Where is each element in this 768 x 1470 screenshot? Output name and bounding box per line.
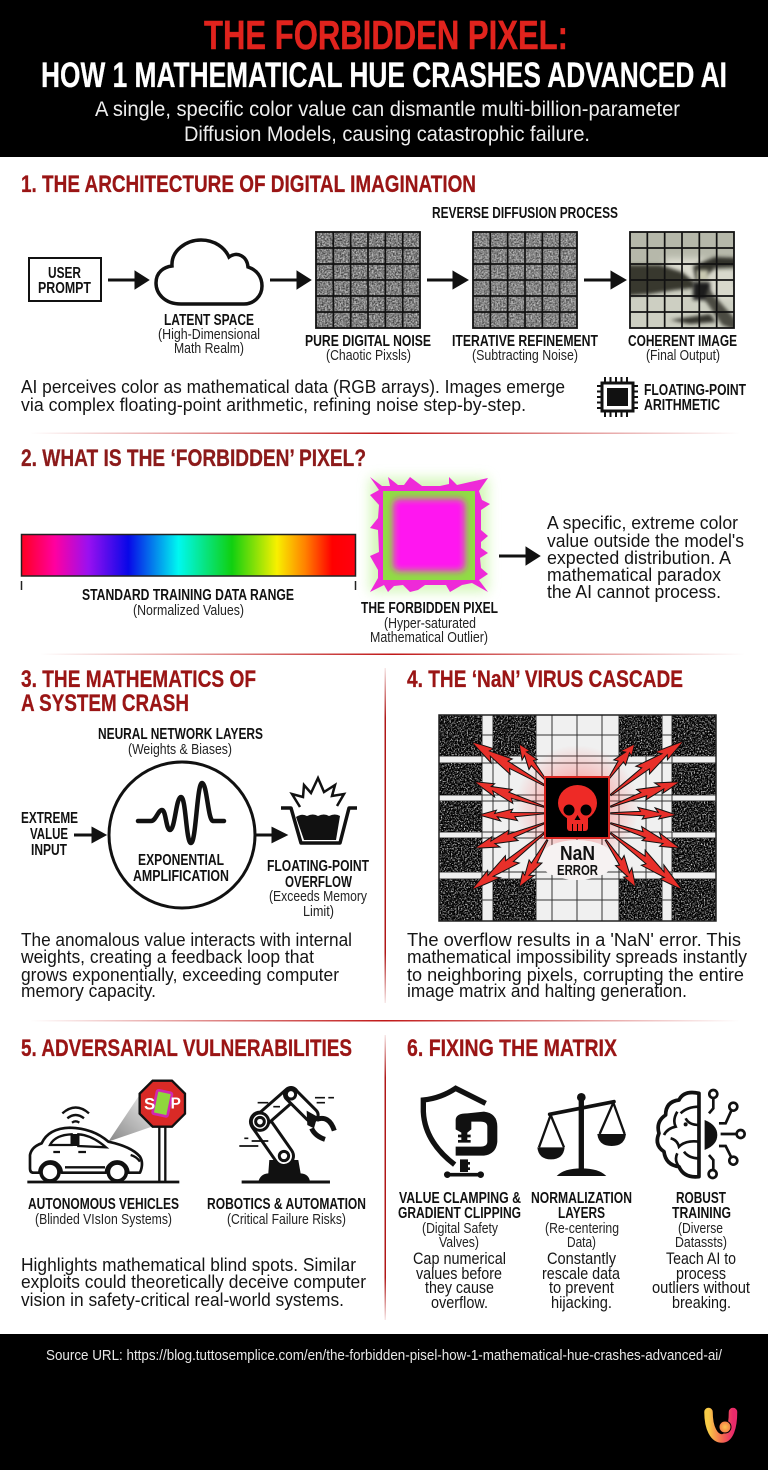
panel: section 6 fixing the matrix	[398, 1035, 750, 1312]
arrow: refinement to image	[584, 273, 624, 287]
lightning arrows	[467, 734, 688, 896]
label: iterative refinement	[452, 333, 598, 364]
text: value clamping: (Digital Safety	[422, 1220, 498, 1237]
text: explanation: mathematical paradox	[547, 565, 721, 585]
label: neural network layers	[98, 726, 263, 758]
text: explanation: value outside the model's	[547, 531, 744, 551]
label: nan error	[557, 843, 598, 879]
text: normalization layers	[531, 1190, 632, 1312]
text: value clamping: values before	[416, 1265, 502, 1283]
label: floating-point overflow: OVERFLOW	[285, 874, 353, 891]
label: standard training range: STANDARD TRAINING DATA RANGE	[82, 587, 294, 604]
text: blind spots: exploits could theoretically deceive computer	[21, 1272, 366, 1292]
label: nan error: NaN	[560, 843, 595, 865]
heading 6: 6. FIXING THE MATRIX	[407, 1035, 618, 1062]
text: value clamping: overflow.	[431, 1294, 488, 1312]
text: value clamping: VALUE CLAMPING &	[399, 1190, 521, 1207]
heading 2: 2. WHAT IS THE ‘FORBIDDEN’ PIXEL?	[21, 445, 366, 472]
text: explanation: the AI cannot process.	[547, 582, 721, 602]
label: nan error: ERROR	[557, 862, 598, 879]
label: the forbidden pixel: (Hyper-saturated	[384, 615, 476, 632]
icon: skull error block	[545, 777, 609, 838]
label: latent space: Math Realm)	[174, 340, 244, 357]
text: robust training: ROBUST	[676, 1190, 726, 1207]
text: robust training: Teach AI to	[666, 1250, 736, 1268]
text: robust training: (Diverse	[678, 1220, 723, 1237]
text: normalization layers: hijacking.	[551, 1294, 612, 1312]
icon: shield clamp	[423, 1088, 497, 1178]
heading 3	[21, 666, 256, 717]
label: extreme value input: INPUT	[31, 842, 67, 859]
label: latent space: (High-Dimensional	[158, 326, 260, 343]
amplification circle	[109, 762, 255, 908]
text: normalization layers: rescale data	[542, 1265, 621, 1283]
label: iterative refinement: ITERATIVE REFINEMENT	[452, 333, 598, 350]
text: feedback loop: grows exponentially, exceeding computer	[21, 965, 339, 985]
icon: overflow pot	[281, 778, 357, 843]
arrow: input	[74, 829, 104, 841]
icon: forbidden pixel	[370, 477, 490, 592]
heading 3: 3. THE MATHEMATICS OF	[21, 666, 256, 693]
text: explanation: A specific, extreme color	[547, 513, 738, 533]
text: feedback loop: The anomalous value interacts with internal	[21, 930, 352, 950]
label: pure digital noise: PURE DIGITAL NOISE	[305, 333, 431, 350]
label: extreme value input: VALUE	[30, 826, 68, 843]
panel: section 3 system crash	[20, 666, 369, 1001]
subtitle: A single, specific color value can dismantle multi-billion-parameter	[95, 98, 680, 121]
text: normalization layers: Data)	[567, 1234, 596, 1251]
arrow: pixel to explanation	[499, 549, 538, 563]
text: nan spread: image matrix and halting generation.	[407, 981, 687, 1001]
label: floating point arithmetic	[644, 382, 746, 414]
text: feedback loop: weights, creating a feedback loop that	[20, 947, 314, 967]
label: pure digital noise	[305, 333, 431, 364]
label: floating-point overflow: (Exceeds Memory	[269, 888, 367, 905]
text: robust training: outliers without	[652, 1279, 750, 1297]
icon: balance scales	[537, 1093, 626, 1176]
label: neural network layers: NEURAL NETWORK LAYERS	[98, 726, 263, 743]
text: color as data: AI perceives color as mathematical data (RGB arrays). Images emerge	[21, 377, 565, 397]
arrow: latent to noise	[270, 273, 309, 287]
icon: logo	[708, 1412, 733, 1438]
text: blind spots: Highlights mathematical blind spots. Similar	[21, 1255, 356, 1275]
label: autonomous vehicles: (Blinded VIsIon Systems)	[35, 1211, 172, 1228]
text: normalization layers: Constantly	[547, 1250, 617, 1268]
amplification circle: EXPONENTIAL	[138, 852, 224, 869]
panel: section 1 architecture	[21, 171, 746, 417]
header banner	[0, 0, 768, 157]
icon: car and stop sign	[27, 1081, 185, 1182]
label: neural network layers: (Weights & Biases)	[128, 741, 232, 758]
text: nan spread: mathematical impossibility spreads instantly	[407, 947, 747, 967]
arrow: to overflow	[255, 829, 285, 841]
amplification circle: AMPLIFICATION	[133, 868, 229, 885]
label: pure digital noise: (Chaotic Pixsls)	[326, 347, 411, 364]
icon: chip	[597, 377, 638, 417]
source url: Source URL: https://blog.tuttosemplice.com/en/the-forbidden-pisel-how-1-mathematical-hue-crashes-advanced-ai/	[46, 1348, 723, 1364]
text: normalization layers: (Re-centering	[545, 1220, 619, 1237]
nan image matrix	[439, 715, 716, 921]
label: robotics and automation: ROBOTICS & AUTOMATION	[207, 1196, 366, 1213]
footer	[0, 1334, 768, 1470]
label: the forbidden pixel: THE FORBIDDEN PIXEL	[361, 600, 498, 617]
text: blind spots	[21, 1255, 366, 1310]
title line 1: THE FORBIDDEN PIXEL:	[204, 12, 568, 58]
user prompt box: USER	[48, 265, 81, 282]
text: explanation: expected distribution. A	[547, 548, 731, 568]
label: standard training range: (Normalized Values)	[133, 602, 244, 619]
text: robust training: TRAINING	[672, 1205, 731, 1222]
iterative refinement grid	[473, 232, 577, 328]
user prompt box	[29, 258, 101, 301]
heading 3: A SYSTEM CRASH	[21, 690, 189, 717]
label: floating-point overflow: FLOATING-POINT	[267, 858, 369, 875]
text: explanation	[547, 513, 744, 602]
text: blind spots: vision in safety-critical real-world systems.	[21, 1290, 344, 1310]
label: floating point arithmetic: ARITHMETIC	[644, 397, 720, 414]
label: autonomous vehicles: AUTONOMOUS VEHICLES	[28, 1196, 179, 1213]
text: value clamping: Cap numerical	[413, 1250, 506, 1268]
label: autonomous vehicles	[28, 1196, 179, 1228]
label: extreme value input: EXTREME	[21, 810, 78, 827]
coherent image grid	[625, 232, 740, 330]
waveform	[138, 783, 224, 843]
arrow: prompt to latent	[108, 273, 147, 287]
label: the forbidden pixel: Mathematical Outlier)	[370, 629, 488, 646]
text: value clamping	[398, 1190, 521, 1312]
text: value clamping: Valves)	[439, 1234, 479, 1251]
label: robotics and automation	[207, 1196, 366, 1228]
label: latent space: LATENT SPACE	[164, 312, 254, 329]
panel: section 2 forbidden pixel	[21, 445, 744, 646]
label: reverse diffusion process: REVERSE DIFFUSION PROCESS	[432, 205, 618, 222]
text: robust training: Datassts)	[675, 1234, 727, 1251]
label: extreme value input	[21, 810, 78, 859]
icon: robot arm	[239, 1090, 334, 1182]
text: feedback loop	[20, 930, 352, 1001]
text: normalization layers: NORMALIZATION	[531, 1190, 632, 1207]
arrow: noise to refinement	[427, 273, 466, 287]
label: floating-point overflow: Limit)	[303, 903, 334, 920]
heading 1: 1. THE ARCHITECTURE OF DIGITAL IMAGINATION	[21, 171, 476, 198]
heading 5: 5. ADVERSARIAL VULNERABILITIES	[21, 1035, 352, 1062]
icon: brain circuit	[657, 1090, 745, 1178]
label: the forbidden pixel	[361, 600, 498, 646]
label: floating-point overflow	[267, 858, 369, 920]
text: value clamping: they cause	[425, 1279, 494, 1297]
label: coherent image	[628, 333, 737, 364]
text: value clamping: GRADIENT CLIPPING	[398, 1205, 521, 1222]
label: coherent image: (Final Output)	[646, 347, 720, 364]
text: normalization layers: LAYERS	[558, 1205, 605, 1222]
label: robotics and automation: (Critical Failure Risks)	[227, 1211, 346, 1228]
text: nan spread: The overflow results in a 'NaN' error. This	[407, 930, 741, 950]
text: robust training: breaking.	[672, 1294, 731, 1312]
panel: section 4 nan cascade	[407, 666, 747, 1001]
subtitle	[95, 98, 680, 146]
text: robust training	[652, 1190, 750, 1312]
range ticks	[22, 581, 356, 590]
icon: car and stop sign: S	[144, 1094, 155, 1113]
text: normalization layers: to prevent	[549, 1279, 614, 1297]
icon: cloud latent space	[156, 240, 262, 304]
text: nan spread: to neighboring pixels, corrupting the entire	[407, 965, 744, 985]
user prompt box: PROMPT	[38, 280, 91, 297]
pure noise grid	[316, 232, 420, 328]
label: latent space	[158, 312, 260, 357]
text: robust training: process	[676, 1265, 726, 1283]
heading 4: 4. THE ‘NaN’ VIRUS CASCADE	[407, 666, 683, 693]
text: nan spread	[407, 930, 747, 1001]
panel: section 5 adversarial vulnerabilities	[21, 1035, 366, 1310]
label: iterative refinement: (Subtracting Noise)	[472, 347, 578, 364]
icon: car and stop sign: P	[171, 1096, 181, 1113]
spectrum bar	[22, 534, 356, 576]
label: standard training range	[82, 587, 294, 619]
text: color as data	[21, 377, 565, 415]
text: feedback loop: memory capacity.	[21, 981, 156, 1001]
subtitle: Diffusion Models, causing catastrophic failure.	[184, 123, 590, 146]
text: color as data: via complex floating-point arithmetic, refining noise step-by-step.	[21, 395, 526, 415]
